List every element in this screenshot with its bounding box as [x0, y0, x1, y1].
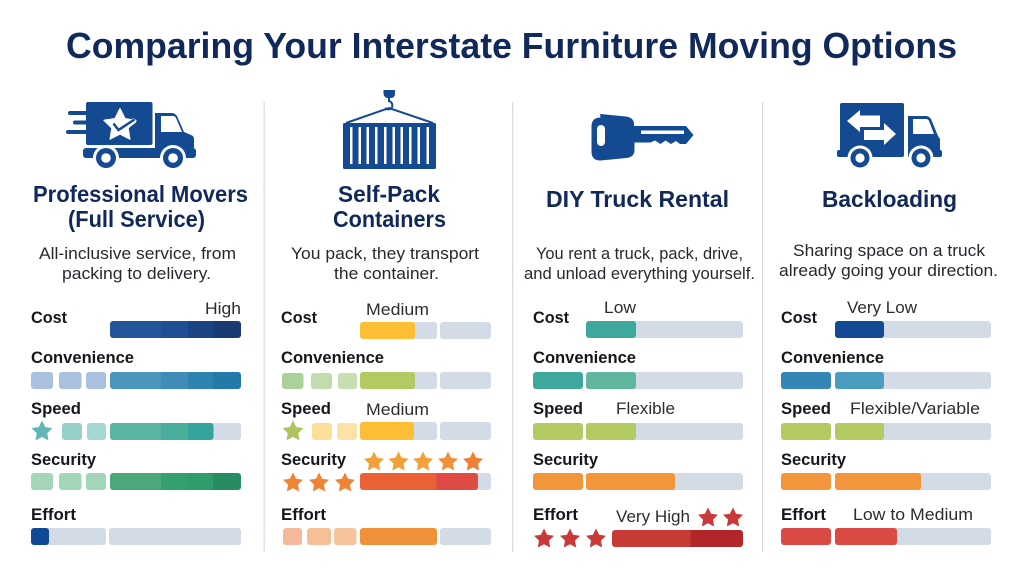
metric: effort: Effort: [781, 506, 827, 524]
metric: security: Security: [781, 451, 847, 469]
icon: shipping container on crane hook: [343, 90, 436, 169]
metric: effort: Effort: [533, 506, 579, 524]
metric: cost: Cost: [281, 309, 317, 327]
icon: truck with exchange arrows: [837, 103, 942, 170]
metric: speed: [781, 400, 991, 440]
metric: speed: Speed: [31, 400, 81, 418]
panel: professional movers: [31, 102, 248, 545]
metric: cost: Cost: [533, 309, 569, 327]
metric: cost: Very Low: [847, 299, 917, 317]
icon: key: [592, 114, 694, 160]
panel: DIY truck rental: [524, 114, 755, 547]
metric: effort: Very High: [616, 508, 690, 526]
metric: speed: [31, 400, 241, 440]
heading: self-pack containers: Containers: [333, 206, 446, 232]
metric: cost: Low: [604, 299, 636, 317]
metric: security: [781, 451, 991, 490]
metric: security: Security: [31, 451, 97, 469]
description: DIY truck rental: and unload everything yourself.: [524, 265, 755, 283]
heading: self-pack containers: Self-Pack: [338, 181, 440, 207]
description: backloading: [779, 242, 998, 280]
metric: speed: Speed: [281, 400, 331, 418]
metric: convenience: Convenience: [533, 349, 636, 367]
description: DIY truck rental: You rent a truck, pack, drive,: [536, 245, 743, 263]
heading: backloading: Backloading: [822, 186, 957, 212]
description: self-pack containers: You pack, they transport: [291, 245, 479, 263]
metric: cost: Medium: [366, 301, 429, 319]
metric: effort: [31, 506, 241, 545]
metric: security: [31, 451, 241, 490]
icon: delivery truck with star: [66, 102, 196, 171]
metric: cost: Cost: [31, 309, 67, 327]
metric: effort: [533, 506, 743, 547]
metric: security: [281, 451, 491, 491]
description: professional movers: packing to delivery.: [62, 265, 211, 283]
heading: professional movers: (Full Service): [68, 206, 205, 232]
metric: speed: Flexible: [616, 400, 675, 418]
description: professional movers: [39, 245, 236, 283]
description: self-pack containers: [291, 245, 479, 283]
metric: cost: Cost: [781, 309, 817, 327]
description: backloading: Sharing space on a truck: [793, 242, 986, 260]
heading: self-pack containers: [333, 181, 446, 232]
metric: speed: Flexible/Variable: [850, 400, 980, 418]
metric: convenience: Convenience: [781, 349, 884, 367]
title: Comparing Your Interstate Furniture Moving Options: [66, 25, 957, 66]
panel: self-pack containers: [281, 90, 491, 545]
metric: convenience: Convenience: [281, 349, 384, 367]
metric: speed: [533, 400, 743, 440]
metric: effort: [281, 506, 491, 545]
metric: cost: [533, 299, 743, 338]
metric: cost: High: [205, 300, 241, 318]
metric: speed: [281, 400, 491, 440]
metric: security: Security: [533, 451, 599, 469]
metric: speed: Medium: [366, 401, 429, 419]
metric: convenience: [281, 349, 491, 389]
metric: effort: Low to Medium: [853, 506, 973, 524]
metric: effort: Effort: [281, 506, 327, 524]
description: professional movers: All-inclusive service, from: [39, 245, 236, 263]
heading: professional movers: Professional Movers: [33, 181, 248, 207]
metric: cost: [281, 301, 491, 339]
description: backloading: already going your direction.: [779, 262, 998, 280]
metric: convenience: [781, 349, 991, 389]
metric: convenience: Convenience: [31, 349, 134, 367]
metric: security: [533, 451, 743, 490]
metric: convenience: [533, 349, 743, 389]
metric: convenience: [31, 349, 241, 389]
metric: security: Security: [281, 451, 347, 469]
description: DIY truck rental: [524, 245, 755, 283]
panel: backloading: [779, 103, 998, 545]
heading: professional movers: [33, 181, 248, 232]
metric: speed: Speed: [533, 400, 583, 418]
metric: speed: Speed: [781, 400, 831, 418]
metric: effort: Effort: [31, 506, 77, 524]
heading: DIY truck rental: DIY Truck Rental: [546, 186, 729, 212]
description: self-pack containers: the container.: [334, 265, 439, 283]
metric: cost: [781, 299, 991, 338]
metric: cost: [31, 300, 241, 338]
metric: effort: [781, 506, 991, 545]
